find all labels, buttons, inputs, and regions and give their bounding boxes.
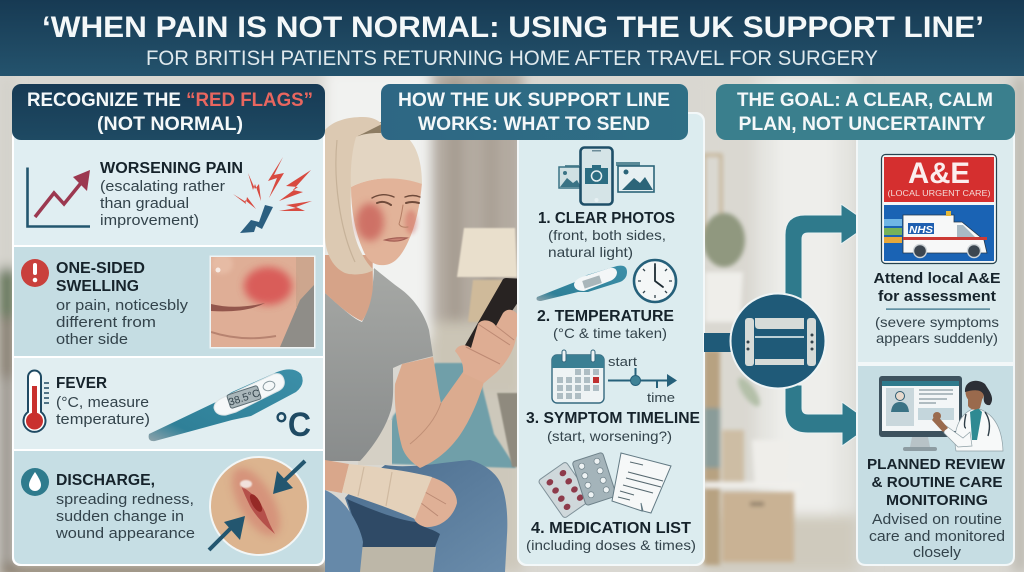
raised arm: [395, 357, 484, 468]
text: one-sided swelling: ONE-SIDED: [56, 260, 145, 277]
teal cushion: [388, 363, 516, 468]
sofa arm: [497, 393, 518, 467]
background sofa behind torso: [358, 420, 392, 465]
text: discharge: DISCHARGE,: [56, 472, 155, 489]
outcome: planned review: Advised on routine: [872, 512, 1002, 528]
item 1: clear photos: natural light): [548, 244, 633, 260]
eyes, nose and mouth: [372, 195, 420, 241]
photo: swollen cheek: [210, 254, 316, 348]
outcome: planned review: [858, 366, 1013, 564]
heading: how the support line works: WORKS: WHAT TO SEND: [418, 113, 650, 135]
row: one-sided swelling: [14, 247, 323, 356]
jeans: near thigh: [325, 490, 363, 572]
icon: monitor and doctor: [879, 376, 1003, 451]
row: fever: [14, 358, 323, 449]
heading: red flags: (NOT NORMAL): [97, 113, 243, 135]
icon: pain lightning bolts: [233, 157, 312, 233]
item 2: temperature: 2. TEMPERATURE: [537, 308, 674, 325]
text: discharge: spreading redness,: [56, 492, 194, 508]
flow arrows and phone hub: [704, 204, 873, 446]
top banner: [0, 0, 1024, 76]
text: fever: [56, 375, 150, 428]
item 4: medication list: [526, 452, 696, 553]
icon: calendar: [552, 350, 604, 403]
heading: red flags: RECOGNIZE THE “RED FLAGS”: [27, 89, 313, 111]
icon: thermometer: [536, 266, 627, 301]
outcome: attend A&E: (severe symptoms: [875, 314, 999, 330]
panel: what to send: [517, 112, 705, 566]
photo: wound with arrows: [209, 457, 308, 555]
item 2: temperature: (°C & time taken): [553, 325, 667, 341]
item 3: symptom timeline: 3. SYMPTOM TIMELINE: [526, 410, 700, 427]
timeline arrow with labels: start: [608, 355, 638, 369]
outcome: attend A&E: [858, 130, 1013, 362]
text: fever: (°C, measure: [56, 395, 149, 411]
arrow to A&E: [785, 204, 870, 300]
bandage wrap around jaw: [325, 117, 382, 274]
t-shirt: [325, 268, 433, 461]
item 1: clear photos: [538, 148, 675, 260]
hair gap: [357, 122, 382, 137]
phone: [463, 278, 531, 357]
item 3: symptom timeline: [526, 350, 700, 444]
icon: digital thermometer: 38.5°C: [227, 387, 262, 409]
arrow to planned review: [785, 385, 873, 446]
item 1: clear photos: (front, both sides,: [548, 227, 666, 243]
text: fever: FEVER: [56, 375, 107, 392]
jeans: far leg: [345, 460, 507, 572]
fist: [414, 477, 457, 527]
jeans: shadow under arm: [347, 499, 440, 547]
text: discharge: sudden change in: [56, 509, 184, 525]
item 2: temperature: [536, 260, 676, 341]
hand on phone: [455, 310, 520, 383]
text: fever: temperature): [56, 412, 150, 428]
icon: rising chart: [28, 168, 90, 226]
text: worsening pain: improvement): [100, 213, 199, 229]
text: discharge: wound appearance: [55, 526, 195, 542]
heading: the goal: [716, 84, 1015, 140]
scene: wall frame and plant: [703, 155, 804, 565]
sign: A&E with ambulance: [882, 154, 996, 264]
sign: A&E with ambulance: (LOCAL URGENT CARE): [888, 188, 991, 198]
panel: red flags: [12, 84, 325, 566]
main title: ‘WHEN PAIN IS NOT NORMAL: USING THE UK SUPPORT LINE’: [42, 11, 984, 44]
flushed cheek: [356, 203, 384, 241]
text: worsening pain: WORSENING PAIN: [100, 160, 243, 177]
subtitle: FOR BRITISH PATIENTS RETURNING HOME AFTER TRAVEL FOR SURGERY: [146, 47, 878, 70]
neck: [325, 255, 373, 321]
heading: how the support line works: HOW THE UK SUPPORT LINE: [398, 89, 670, 111]
outcome: attend A&E: appears suddenly): [876, 330, 998, 346]
item 4: medication list: 4. MEDICATION LIST: [531, 520, 692, 537]
item 4: medication list: (including doses & times): [526, 537, 696, 553]
heading: the goal: THE GOAL: A CLEAR, CALM: [737, 89, 993, 111]
text: one-sided swelling: or pain, noticesbly: [56, 298, 189, 314]
doctor: [932, 381, 1003, 451]
outcome: planned review: PLANNED REVIEW: [867, 456, 1006, 473]
sign: A&E with ambulance: A&E: [908, 157, 970, 190]
panel: outcomes: [856, 130, 1015, 566]
item 3: symptom timeline: (start, worsening?): [547, 428, 672, 444]
icon: digital thermometer: [149, 369, 303, 441]
outcome: planned review: MONITORING: [886, 492, 988, 509]
person with bandaged face reading phone: [325, 117, 531, 572]
face: [351, 178, 422, 265]
ambulance: NHS: [909, 224, 933, 236]
outcome: attend A&E: for assessment: [878, 288, 996, 305]
text: one-sided swelling: [56, 260, 189, 348]
row: discharge: [14, 451, 323, 564]
text: one-sided swelling: different from: [56, 315, 156, 331]
icon: water drop: [21, 468, 49, 496]
heading: how the support line works: [381, 84, 688, 140]
hub: phone icon: [730, 294, 826, 388]
outcome: planned review: care and monitored: [869, 529, 1005, 545]
row: worsening pain: [14, 130, 323, 245]
seat cushion: [360, 546, 436, 572]
label: degrees celsius: °C: [275, 406, 311, 444]
heading: red flags: [12, 84, 325, 140]
connector from panel: [704, 333, 734, 352]
outcome: planned review: & ROUTINE CARE: [872, 474, 1002, 491]
wrist bandage: [342, 464, 432, 519]
scene: lamp: [457, 228, 517, 322]
text: worsening pain: (escalating rather: [100, 179, 225, 195]
lower forearm: [325, 460, 349, 493]
text: one-sided swelling: other side: [56, 332, 128, 348]
text: worsening pain: than gradual: [100, 196, 189, 212]
heading: the goal: PLAN, NOT UNCERTAINTY: [738, 113, 986, 135]
outcome: planned review: closely: [913, 545, 962, 561]
timeline arrow with labels: time: [647, 391, 675, 405]
icon: red thermometer: [23, 371, 49, 432]
icon: pill blisters and prescription: [538, 452, 671, 519]
forehead bandage: [351, 133, 422, 187]
text: one-sided swelling: SWELLING: [56, 278, 139, 295]
outcome: attend A&E: Attend local A&E: [874, 270, 1000, 287]
text: worsening pain: [100, 160, 243, 229]
item 1: clear photos: 1. CLEAR PHOTOS: [538, 210, 675, 227]
icon: phone camera and photos: [559, 148, 654, 204]
icon: clock: [634, 260, 676, 302]
text: discharge: [55, 472, 195, 542]
icon: red exclamation: [21, 259, 49, 287]
timeline arrow with labels: [608, 355, 677, 405]
